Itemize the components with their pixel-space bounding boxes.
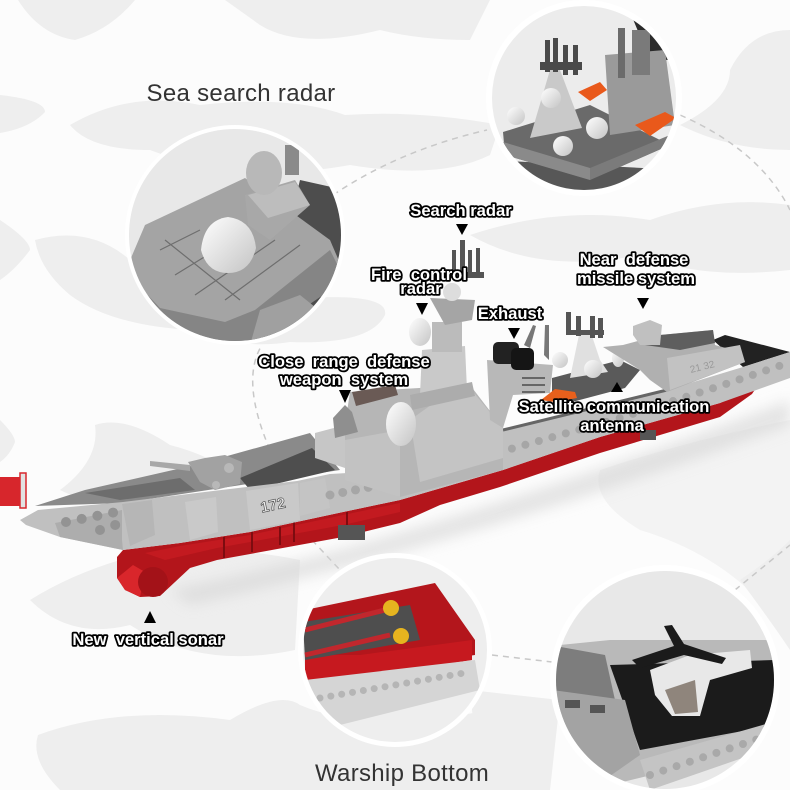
hull number: 172 [259, 495, 287, 517]
label: satellite communication antenna [519, 382, 709, 435]
label: near defense missile system: Near defense [580, 250, 688, 269]
warship model [0, 240, 790, 597]
label: new vertical sonar: New vertical sonar [72, 630, 224, 649]
flag [0, 473, 26, 508]
label: exhaust: Exhaust [478, 304, 543, 323]
label: near defense missile system [577, 250, 695, 309]
label: satellite communication antenna: Satellite communication [519, 397, 709, 416]
mid deck with missile system [541, 312, 640, 402]
rear superstructure: 21 32 [689, 359, 716, 376]
close range weapon [333, 405, 358, 438]
forward gun [150, 455, 242, 490]
rear dark deck [713, 335, 790, 367]
label: new vertical sonar [72, 611, 224, 649]
keel support [338, 430, 656, 540]
label: fire control radar: radar [400, 279, 442, 298]
label: close range defense weapon system: Close range defense [258, 352, 430, 371]
red lower hull [117, 385, 758, 597]
search radar array [448, 240, 484, 278]
rear superstructure [603, 320, 745, 392]
label: fire control radar [371, 265, 467, 315]
label: close range defense weapon system [258, 352, 430, 403]
heading: sea search radar: Sea search radar [147, 80, 335, 107]
orange part [541, 389, 577, 402]
hull studs [405, 363, 788, 482]
detail circle: sea search radar [125, 125, 345, 345]
detail circle: top right [490, 6, 680, 190]
exhaust section [487, 325, 553, 428]
foredeck [35, 433, 340, 506]
grey main hull [20, 352, 790, 550]
label: search radar [410, 201, 512, 235]
label: search radar: Search radar [410, 201, 512, 220]
helicopter [632, 625, 752, 716]
dashed connector lines [253, 115, 790, 662]
superstructure [315, 240, 503, 497]
ship shadow [170, 400, 790, 605]
label: near defense missile system: missile system [577, 269, 695, 288]
fire control dome [409, 318, 431, 346]
detail circle: warship bottom [298, 553, 492, 747]
heading: warship bottom: Warship Bottom [315, 760, 489, 787]
label: fire control radar: Fire control [371, 265, 467, 284]
detail circle: helicopter deck [550, 565, 780, 790]
label: satellite communication antenna: antenna [580, 416, 645, 435]
label: close range defense weapon system: weapon system [279, 370, 408, 389]
label: exhaust [478, 304, 543, 339]
mast [430, 298, 475, 325]
